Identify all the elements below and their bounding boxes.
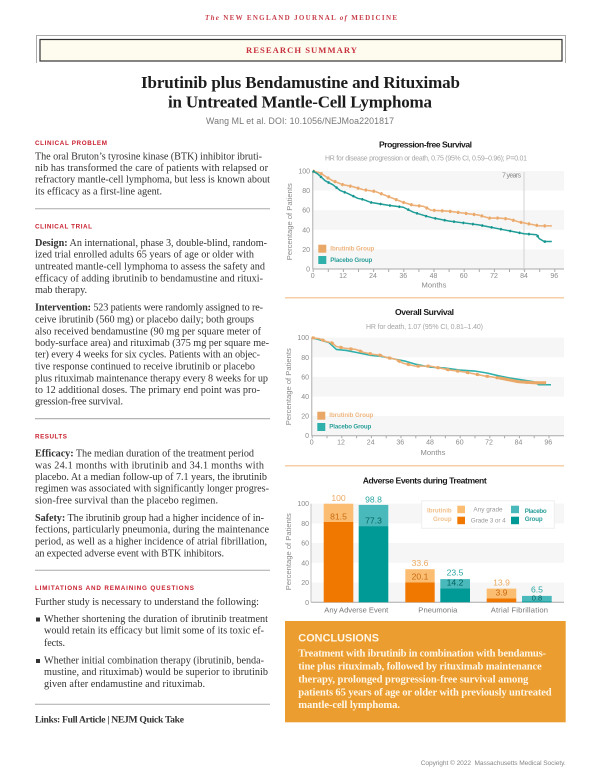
text block: design (35, 238, 268, 296)
text block: efficacy (35, 449, 270, 507)
x axis labels: 96 (544, 439, 552, 446)
text block: design: untreated mantle-cell lymphoma to assess the safety and (35, 261, 265, 272)
x axis labels (310, 439, 552, 446)
text block: conclusions: mantle-cell lymphoma. (298, 700, 400, 711)
bullet 1: fects. (44, 638, 65, 649)
text block: intervention: ceive ibrutinib (560 mg) or placebo daily; both groups (35, 314, 254, 325)
text block: conclusions: therapy, prolonged progression-free survival among (298, 674, 529, 685)
bullet 2: given after endamustine and rituximab. (44, 679, 205, 690)
title (141, 73, 460, 112)
x axis labels: 12 (339, 273, 347, 280)
text block: design: ized trial enrolled adults 65 years of age or older with (35, 250, 254, 261)
7-year marker: 7 years (502, 173, 522, 180)
journal masthead: The NEW ENGLAND JOURNAL of MEDICINE (205, 14, 397, 22)
category labels: Pneumonia (418, 605, 458, 614)
y axis labels: 60 (301, 541, 309, 548)
value labels: 23.5 (447, 568, 464, 578)
title: in Untreated Mantle-Cell Lymphoma (168, 92, 432, 112)
x axis title: Months (421, 448, 446, 457)
value labels: 3.9 (496, 587, 508, 597)
x axis labels: 36 (399, 273, 407, 280)
banner: research summary (36, 36, 566, 63)
hazard ratio: HR for disease progression or death, 0.75 (95% CI, 0.59–0.96); P=0.01 (325, 156, 527, 163)
text block: design: Design: An international, phase 3, double-blind, random- (35, 238, 268, 249)
text block: intervention: body-surface area) and rituximab (375 mg per square me- (35, 338, 270, 349)
x axis labels: 48 (430, 273, 437, 280)
category labels: Atrial Fibrillation (491, 605, 548, 614)
y axis labels: 100 (297, 335, 309, 342)
x axis labels: 96 (550, 273, 558, 280)
legend: Ibrutinib Group (330, 246, 375, 253)
bullet 1: Whether shortening the duration of ibrutinib treatment (44, 614, 268, 625)
heading: results: RESULTS (35, 434, 67, 441)
y axis labels: 20 (301, 414, 309, 421)
category labels: Any Adverse Event (324, 605, 389, 614)
value labels: 0.8 (532, 594, 542, 603)
text block: clinical problem: refractory mantle-cell lymphoma, but less is known about (35, 175, 270, 186)
text block: design: mab therapy. (35, 285, 87, 296)
text block: safety: period, as well as a higher incidence of atrial fibrillation, (35, 536, 267, 547)
panel: results (35, 434, 270, 559)
legend: Any grade (473, 506, 503, 513)
text block: clinical problem (35, 151, 270, 198)
y axis title: Percentage of Patients (284, 513, 293, 590)
value labels (330, 493, 543, 603)
y axis labels: 60 (302, 208, 310, 215)
chart title: Overall Survival (395, 307, 454, 317)
y axis labels: 80 (301, 521, 309, 528)
value labels: 13.9 (493, 578, 510, 588)
banner: research summary: RESEARCH SUMMARY (246, 45, 358, 55)
text block: intervention: plus rituximab maintenance therapy every 8 weeks for up (35, 373, 268, 384)
x axis labels: 36 (396, 439, 404, 446)
panel: clinical trial (35, 224, 270, 408)
value labels: 77.3 (365, 516, 382, 526)
text block: conclusions: Treatment with ibrutinib in combination with bendamus- (298, 649, 546, 660)
legend (422, 501, 554, 528)
x axis labels: 60 (456, 439, 464, 446)
text block: safety (35, 513, 269, 559)
bars: any adverse event (324, 504, 388, 602)
y axis labels: 0 (305, 600, 309, 607)
x axis labels: 0 (311, 273, 315, 280)
legend (317, 412, 374, 431)
text block: conclusions (298, 649, 552, 711)
text block: intervention: Intervention: 523 patients were randomly assigned to re- (35, 303, 264, 314)
legend: Group (433, 516, 452, 523)
y axis labels: 40 (301, 560, 309, 567)
legend: Placebo (525, 508, 547, 515)
bullet 1: would retain its efficacy but limit some of its toxic ef- (44, 626, 265, 637)
copyright: Copyright © 2022 Massachusetts Medical Society. (421, 759, 566, 767)
bullet 2: Whether initial combination therapy (ibrutinib, benda- (44, 655, 265, 666)
bullet 1 (36, 614, 268, 649)
y axis labels: 60 (301, 374, 309, 381)
value labels: 98.8 (365, 494, 382, 504)
panel: limitations and remaining questions (35, 585, 268, 690)
text block: intro: Further study is necessary to understand the following: (35, 597, 259, 608)
y axis labels: 80 (302, 188, 310, 195)
7-year marker (502, 172, 524, 271)
y axis title: Percentage of Patients (285, 183, 294, 260)
text block: intervention: tive response continued to receive ibrutinib or placebo (35, 361, 255, 372)
chart title: Adverse Events during Treatment (363, 476, 487, 486)
text block: design: efficacy of adding ibrutinib to bendamustine and rituxi- (35, 273, 264, 284)
x axis labels: 72 (490, 273, 498, 280)
bullet 2 (36, 655, 268, 690)
x axis labels: 60 (460, 273, 468, 280)
y axis labels: 20 (301, 580, 309, 587)
text block: efficacy: Efficacy: The median duration of the treatment period (35, 449, 254, 460)
heading: clinical trial: CLINICAL TRIAL (35, 224, 92, 231)
text block: clinical problem: its efficacy as a first-line agent. (35, 187, 162, 198)
legend: Placebo Group (330, 257, 373, 264)
y axis labels: 100 (298, 168, 310, 176)
x axis labels: 0 (310, 439, 314, 446)
chart title: Progression-free Survival (379, 140, 472, 150)
text block: intervention (35, 303, 270, 408)
x axis labels: 84 (520, 273, 528, 280)
value labels: 20.1 (412, 571, 429, 581)
y axis labels (298, 168, 310, 274)
heading: conclusions: CONCLUSIONS (298, 633, 379, 645)
hazard ratio: HR for death, 1.07 (95% CI, 0.81–1.40) (366, 324, 483, 331)
text block: intervention: gression-free survival. (35, 397, 123, 408)
text block: clinical problem: nib has transformed the care of patients with relapsed or (35, 163, 269, 174)
y axis labels: 0 (305, 433, 309, 440)
heading: clinical problem: CLINICAL PROBLEM (35, 140, 107, 147)
links: Links: Full Article | NEJM Quick Take (35, 714, 185, 725)
text block: efficacy: regimen was associated with significantly longer progres- (35, 484, 270, 495)
legend: Ibrutinib (427, 508, 452, 515)
text block: safety: an expected adverse event with BTK inhibitors. (35, 548, 224, 559)
x axis title: Months (422, 281, 447, 290)
value labels: 14.2 (447, 578, 464, 588)
bars: atrial fibrillation (487, 589, 552, 602)
text block: efficacy: was 24.1 months with ibrutinib and 34.1 months with (35, 460, 264, 471)
bars: pneumonia (405, 569, 470, 602)
y axis labels: 20 (302, 247, 310, 254)
legend: Group (525, 516, 543, 523)
text block: intervention: ter) every 4 weeks for six cycles. Patients with an objec- (35, 350, 261, 361)
text block: safety: fections, particularly pneumonia, during the maintenance (35, 525, 269, 536)
chart: adverse events during treatment (284, 476, 564, 614)
x axis labels: 72 (485, 439, 493, 446)
x axis labels: 12 (337, 439, 345, 446)
x axis labels: 84 (515, 439, 522, 446)
text block: clinical problem: The oral Bruton’s tyrosine kinase (BTK) inhibitor ibruti- (35, 151, 263, 162)
chart: progression-free survival (285, 140, 564, 290)
curve: placebo (312, 338, 551, 385)
text block: intervention: to 12 additional doses. The primary end point was pro- (35, 385, 261, 396)
y axis labels: 100 (297, 501, 309, 508)
x axis labels: 48 (426, 439, 434, 446)
text block: safety: Safety: The ibrutinib group had a higher incidence of in- (35, 513, 265, 524)
legend: Grade 3 or 4 (471, 518, 506, 525)
y axis labels: 40 (301, 394, 309, 401)
legend: Ibrutinib Group (329, 412, 374, 419)
value labels: 33.6 (412, 558, 429, 568)
y axis labels: 0 (306, 266, 310, 274)
y axis labels (297, 335, 309, 440)
value labels: 100 (331, 493, 346, 503)
category labels (324, 605, 548, 614)
curve: ibrutinib (313, 171, 552, 226)
value labels: 6.5 (531, 585, 543, 595)
legend (318, 245, 375, 264)
citation: Wang ML et al. DOI: 10.1056/NEJMoa2201817 (206, 116, 394, 126)
value labels: 81.5 (330, 511, 347, 521)
legend: Placebo Group (329, 423, 372, 430)
title: Ibrutinib plus Bendamustine and Rituximab (141, 73, 460, 92)
chart: overall survival (284, 307, 564, 457)
text block: intervention: also received bendamustine (90 mg per square meter of (35, 326, 262, 337)
text block: efficacy: placebo. At a median follow-up of 7.1 years, the ibrutinib (35, 472, 267, 483)
text block: conclusions: patients 65 years of age or older with previously untreated (298, 687, 552, 698)
bullet 2: mustine, and rituximab) would be superior to ibrutinib (44, 667, 268, 678)
panel: clinical problem (35, 140, 270, 198)
x axis labels (311, 273, 558, 280)
y axis labels: 80 (301, 355, 309, 362)
x axis labels: 24 (369, 273, 377, 280)
y axis title: Percentage of Patients (284, 348, 293, 425)
text block: conclusions: tine plus rituximab, followed by rituximab maintenance (298, 662, 542, 673)
y axis labels (297, 501, 309, 607)
curve: ibrutinib (312, 338, 546, 383)
curve: placebo (313, 171, 552, 242)
y axis labels: 40 (302, 227, 310, 234)
text block: efficacy: sion-free survival than the placebo regimen. (35, 496, 218, 507)
heading: limitations: LIMITATIONS AND REMAINING QUESTIONS (35, 585, 194, 592)
x axis labels: 24 (367, 439, 375, 446)
panel: conclusions (285, 621, 566, 722)
